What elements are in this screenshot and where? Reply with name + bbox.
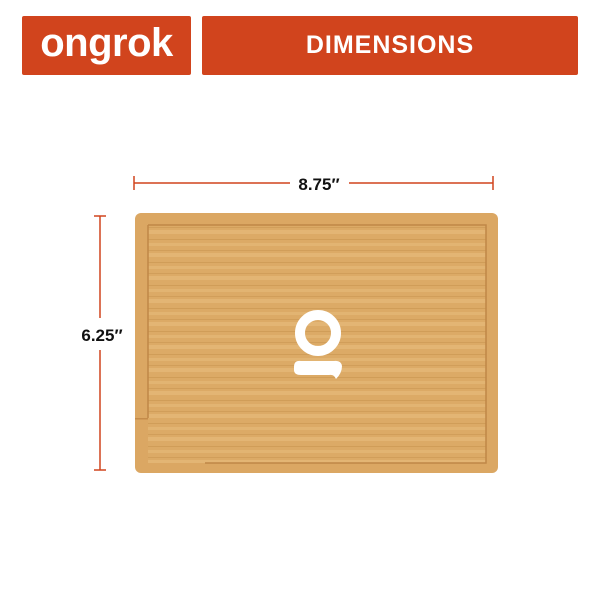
title: dimensions: DIMENSIONS <box>306 31 474 59</box>
icon: logo g <box>294 315 342 379</box>
logo box <box>22 16 191 75</box>
logo box: ongrok <box>40 21 173 65</box>
dimension arrows: 6.25″ <box>81 326 123 345</box>
title: dimensions <box>202 16 578 75</box>
dimension arrows: 8.75″ <box>298 175 340 194</box>
